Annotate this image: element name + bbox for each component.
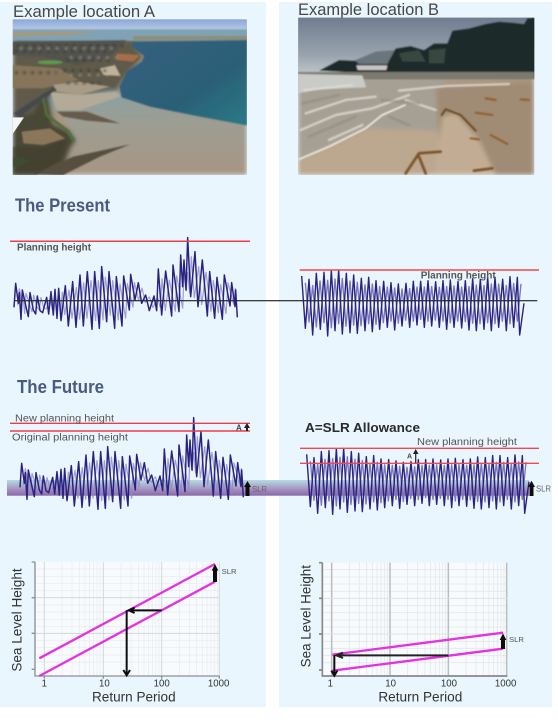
label: A: A — [236, 424, 242, 432]
x axis tick labels: 10 — [385, 679, 396, 690]
x axis tick labels: 1000 — [495, 679, 516, 690]
heading: example location B: Example location B — [298, 0, 439, 19]
chart: present water levels at location A — [10, 238, 250, 329]
label: planning height: Planning height — [421, 270, 496, 281]
label: new planning height: New planning height — [417, 437, 517, 448]
photo: stormy beach with trees — [298, 15, 538, 175]
label: SLR: SLR — [536, 485, 551, 494]
label: SLR allowance definition: A=SLR Allowance — [305, 420, 420, 435]
y axis title: Sea Level Height — [298, 565, 313, 667]
future return level line — [332, 633, 503, 655]
arrow: sea level rise — [212, 564, 218, 582]
x axis title: Return Period — [92, 690, 176, 705]
chart: present water levels at location B — [300, 270, 539, 336]
chart: future water levels at location B — [300, 420, 551, 514]
x axis tick labels: 1 — [42, 679, 47, 690]
new planning height line — [300, 447, 539, 449]
label: original planning height: Original planning height — [12, 432, 128, 443]
label: SLR: SLR — [509, 635, 524, 644]
future return level line — [39, 564, 215, 658]
label: SLR: SLR — [222, 567, 237, 576]
arrow: vertical drop to new return period — [331, 655, 337, 676]
photo: aerial view of coastal town and bay — [13, 17, 247, 175]
x axis tick labels — [42, 679, 229, 690]
planning height line — [300, 269, 539, 271]
arrow: horizontal return period shift — [129, 608, 162, 613]
original planning height line — [300, 462, 539, 464]
panel: example location A — [0, 2, 266, 707]
arrow: allowance A — [244, 423, 250, 431]
label: A: A — [407, 454, 412, 461]
heading: the future: The Future — [17, 377, 104, 397]
current return level line — [332, 649, 503, 671]
x axis title: Return Period — [378, 690, 462, 705]
x axis tick labels — [328, 679, 516, 690]
chart: future water levels at location A — [10, 414, 267, 509]
current return level line — [39, 582, 215, 676]
x axis tick labels: 1 — [328, 679, 333, 690]
x axis tick labels: 10 — [99, 679, 110, 690]
x axis tick labels: 1000 — [208, 679, 229, 690]
label: new planning height: New planning height — [15, 414, 114, 425]
arrow: vertical drop to new return period — [123, 610, 130, 675]
y axis title: Sea Level Height — [10, 568, 25, 672]
planning height line — [10, 240, 250, 242]
original planning height line — [10, 430, 250, 432]
x axis tick labels: 100 — [154, 679, 170, 690]
label: planning height: Planning height — [17, 243, 92, 254]
x axis tick labels: 100 — [441, 679, 457, 690]
heading: example location A: Example location A — [13, 2, 156, 21]
arrow: sea level rise — [528, 481, 535, 496]
panel: example location B — [279, 0, 552, 707]
arrow: allowance A — [413, 449, 418, 463]
horizontal mean sea level line — [14, 300, 537, 301]
heading: the present: The Present — [15, 196, 110, 216]
sea level rise band — [7, 480, 529, 496]
arrow: sea level rise — [244, 481, 251, 496]
chart: return period curve, location A — [10, 562, 237, 705]
chart: return period curve, location B — [298, 563, 524, 705]
arrow: horizontal return period shift — [336, 653, 448, 658]
new planning height line — [10, 422, 250, 424]
label: SLR: SLR — [252, 485, 267, 494]
arrow: sea level rise — [500, 633, 506, 649]
